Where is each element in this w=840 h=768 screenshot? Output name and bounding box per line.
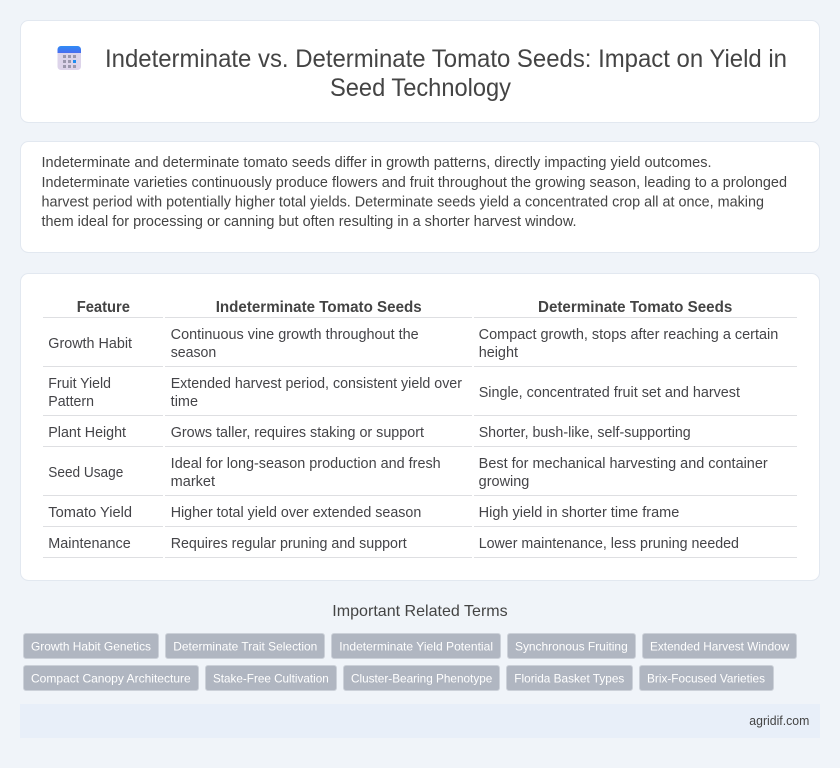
row: tomato yield: Tomato Yield [48,505,132,521]
tag: stake-free cultivation [206,666,336,690]
heading: important related terms: Important Related Terms [332,603,508,620]
row: seed usage: Best for mechanical harvesting and container [479,456,768,472]
text block: summary: them ideal for processing or canning but often resulting in a shorter harvest window. [42,214,576,230]
row: seed usage: market [171,474,215,490]
row: plant height: Grows taller, requires staking or support [171,425,424,441]
row: seed usage: Ideal for long-season production and fresh [171,456,441,472]
row: maintenance: Lower maintenance, less pruning needed [479,536,739,552]
text block: summary: harvest period with potentially higher total yields. Determinate seeds yield a concentrated crop all at once, making [42,194,764,210]
row: plant height: Shorter, bush-like, self-supporting [479,425,691,441]
row: plant height [48,425,691,441]
tag: synchronous fruiting [508,634,636,658]
row: seed usage: Seed Usage [48,465,123,481]
table header: Determinate Tomato Seeds [538,299,732,316]
row: fruit yield pattern: Fruit Yield [48,376,111,392]
row: growth habit: Growth Habit [48,336,132,352]
row: maintenance [48,536,739,552]
tag: compact canopy architecture [24,666,198,690]
tag: cluster-bearing phenotype: Cluster-Bearing Phenotype [351,671,493,685]
table header [77,299,732,316]
tag: growth habit genetics [24,634,158,658]
row: growth habit: Compact growth, stops after reaching a certain [479,327,778,343]
row: maintenance: Maintenance [48,536,131,552]
tag: determinate trait selection: Determinate Trait Selection [173,639,317,653]
tag: stake-free cultivation: Stake-Free Cultivation [213,671,329,685]
panel: comparison table [20,274,820,580]
tag: extended harvest window [642,634,796,658]
row: seed usage [48,456,768,490]
tag: brix-focused varieties [640,666,774,690]
tag: synchronous fruiting: Synchronous Fruiting [515,639,628,653]
row: maintenance: Requires regular pruning and support [171,536,407,552]
tag: determinate trait selection [166,634,324,658]
tag: growth habit genetics: Growth Habit Genetics [31,639,151,653]
text block: summary [42,155,787,230]
footer [20,704,820,738]
row: tomato yield: Higher total yield over extended season [171,505,421,521]
title: Seed Technology [330,74,511,102]
row: fruit yield pattern: Extended harvest period, consistent yield over [171,376,462,392]
tag: cluster-bearing phenotype [344,666,500,690]
tags: related terms [24,634,796,690]
tag: florida basket types [506,666,632,690]
row: seed usage: growing [479,474,529,490]
row: tomato yield: High yield in shorter time frame [479,505,679,521]
tag: indeterminate yield potential: Indeterminate Yield Potential [339,639,493,653]
tag: compact canopy architecture: Compact Canopy Architecture [31,671,191,685]
row: growth habit: season [171,345,216,361]
row: growth habit: height [479,345,518,361]
text block: summary: Indeterminate varieties continuously produce flowers and fruit throughout the growing season, leading to a prolonged [42,175,787,191]
panel: intro paragraph [20,142,820,252]
table header: Indeterminate Tomato Seeds [216,299,422,316]
tag: brix-focused varieties: Brix-Focused Varieties [647,671,765,685]
row: fruit yield pattern [48,376,740,410]
row: growth habit: Continuous vine growth throughout the [171,327,419,343]
panel: title card [20,20,820,122]
table header: Feature [77,299,130,316]
tag: florida basket types: Florida Basket Types [514,671,624,685]
tag: indeterminate yield potential [332,634,500,658]
text block: summary: Indeterminate and determinate tomato seeds differ in growth patterns, directly impacting yield outcomes. [42,155,712,171]
row: fruit yield pattern: Pattern [48,394,94,410]
icon: calendar [58,46,81,70]
row: fruit yield pattern: Single, concentrated fruit set and harvest [479,385,740,401]
row: plant height: Plant Height [48,425,126,441]
row: tomato yield [48,505,679,521]
footer: agridif.com [749,714,809,728]
title [105,45,787,102]
row: fruit yield pattern: time [171,394,198,410]
row: growth habit [48,327,778,361]
title: Indeterminate vs. Determinate Tomato Seeds: Impact on Yield in [105,45,787,73]
tag: extended harvest window: Extended Harvest Window [650,639,790,653]
